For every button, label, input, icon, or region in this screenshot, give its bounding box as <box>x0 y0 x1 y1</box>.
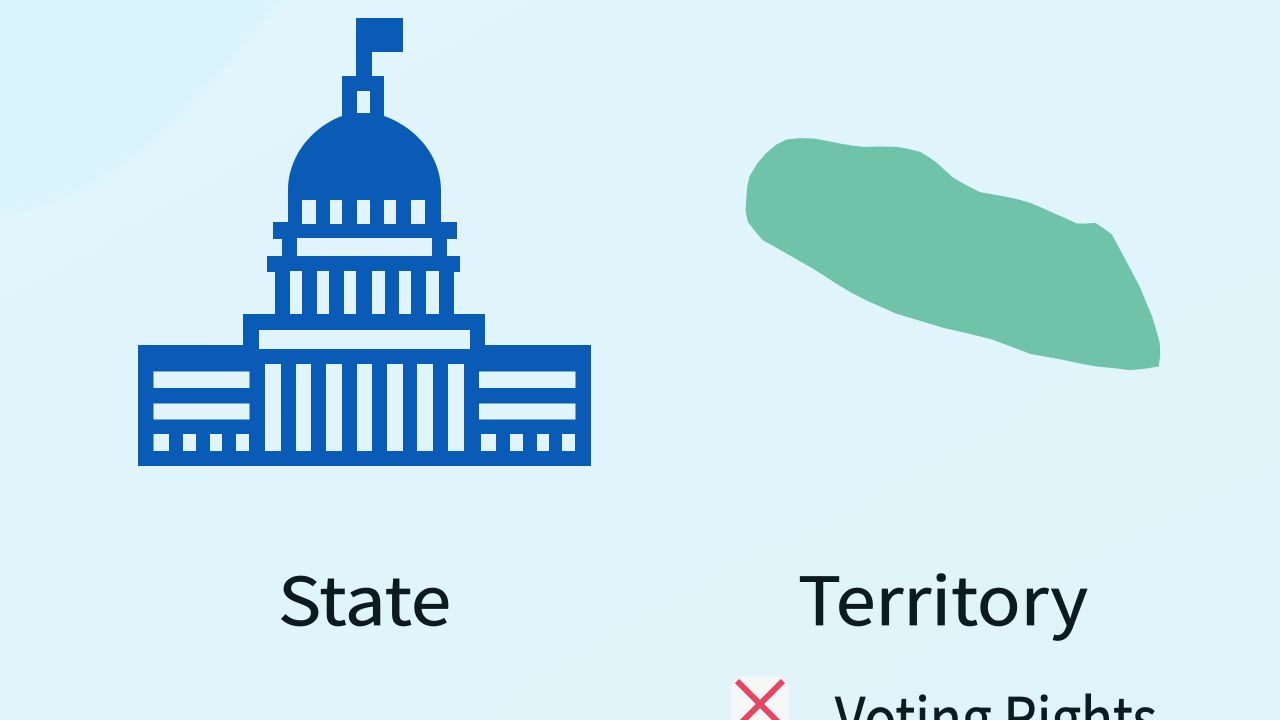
icon: territory landmass <box>746 139 1160 370</box>
icon: red cross on white tile <box>731 677 789 720</box>
heading: Territory: Territory <box>798 549 1088 645</box>
icon: state capitol building <box>138 18 591 466</box>
heading: State: State <box>278 549 451 645</box>
